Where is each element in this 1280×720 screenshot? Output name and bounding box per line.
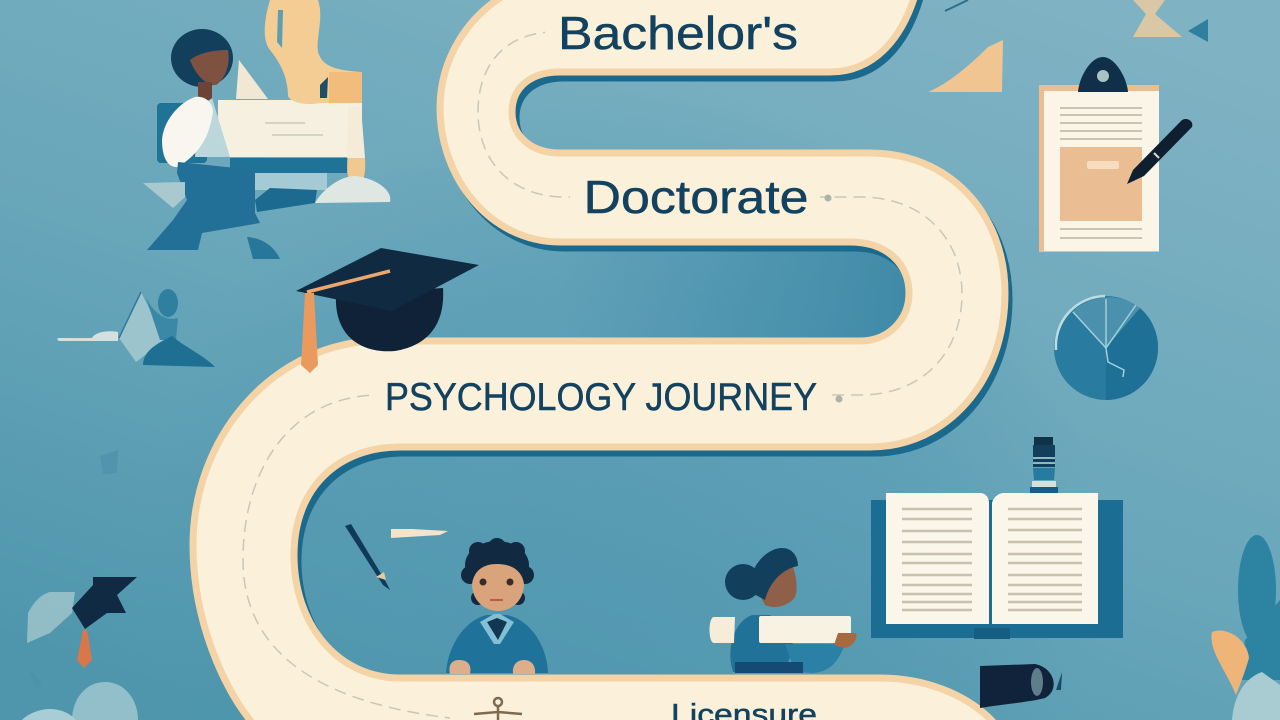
pale cushion [143, 182, 185, 208]
icon: left silhouette figure [57, 289, 215, 367]
left page [886, 493, 989, 624]
desk lines [265, 123, 323, 135]
icon: small cap bottom left [27, 577, 137, 688]
cap tassel cord [307, 271, 390, 292]
face [190, 50, 229, 85]
page lines [902, 509, 1082, 610]
chair back [157, 103, 207, 163]
hair [750, 548, 798, 600]
icon: dark canister [980, 664, 1062, 708]
shoe [315, 176, 390, 203]
neck [198, 82, 212, 100]
dark lap [735, 662, 803, 673]
icon: hourglass top right [1133, 0, 1182, 37]
heading: Doctorate: Doctorate [584, 171, 808, 223]
hair bun [725, 564, 761, 600]
loose shard [247, 237, 280, 259]
road dots [824, 194, 842, 402]
text lines [1060, 108, 1142, 238]
mouth [490, 599, 503, 601]
pen [1127, 119, 1192, 184]
notch [277, 10, 283, 48]
cap base [336, 288, 443, 351]
white sleeve [162, 97, 213, 167]
road shadow [197, 0, 1009, 720]
head [472, 564, 524, 611]
clip [1078, 57, 1128, 92]
heading: Bachelor's: Bachelor's [558, 7, 798, 59]
right page [992, 493, 1098, 624]
paper [1044, 91, 1159, 251]
icon: student boy [446, 538, 548, 674]
pie chart [1054, 296, 1158, 400]
torso [730, 615, 794, 672]
left hand [449, 660, 470, 674]
icon: blue triangle top right [1188, 19, 1208, 42]
collar [480, 614, 514, 644]
icon: faint shard left [100, 450, 118, 474]
arm [785, 644, 845, 673]
icon: peach wedge [928, 40, 1003, 92]
desk laptop lid [218, 100, 362, 157]
face [758, 558, 797, 607]
paper scroll [710, 617, 735, 643]
pale gap [255, 173, 327, 190]
icon: open book [871, 493, 1123, 639]
torso [195, 98, 230, 157]
right arm [347, 107, 365, 158]
peach block [329, 72, 362, 103]
hair [171, 29, 233, 87]
right bend tint [500, 240, 920, 345]
icon: seated student [143, 29, 390, 259]
cap board [296, 248, 479, 311]
road centre dashes [243, 32, 962, 718]
right hand [513, 660, 535, 674]
background inner tint [140, 90, 1100, 720]
desk edge [230, 158, 347, 173]
cap tassel [301, 293, 318, 373]
icon: small stroke top [945, 0, 968, 11]
heading: Psychology Journey: PSYCHOLOGY JOURNEY [385, 376, 817, 419]
icon: pencil [345, 524, 390, 590]
peach block [1060, 147, 1142, 221]
trouser leg [255, 188, 317, 212]
icon: graduation cap [296, 248, 479, 373]
road surface with border [193, 0, 1005, 720]
icon: peach figure top [265, 0, 362, 104]
icon: student girl [710, 548, 856, 673]
book clasp [974, 628, 1010, 639]
icon: clipboard [1039, 57, 1192, 252]
icon: small emblem [474, 698, 522, 720]
curly hair [461, 538, 534, 605]
eyes [480, 578, 486, 586]
hand [834, 633, 856, 648]
label backing patches [375, 8, 830, 420]
winding road [193, 0, 1009, 720]
icon: right bottom figure [1211, 535, 1280, 720]
book cover [871, 500, 1123, 638]
trousers [147, 162, 260, 250]
body [446, 615, 548, 673]
icon: clouds bottom left [22, 682, 138, 720]
icon: ink bottle [1030, 437, 1058, 493]
clipboard board [1039, 85, 1159, 252]
icon: chalk [391, 529, 448, 538]
paper triangle [236, 60, 268, 99]
